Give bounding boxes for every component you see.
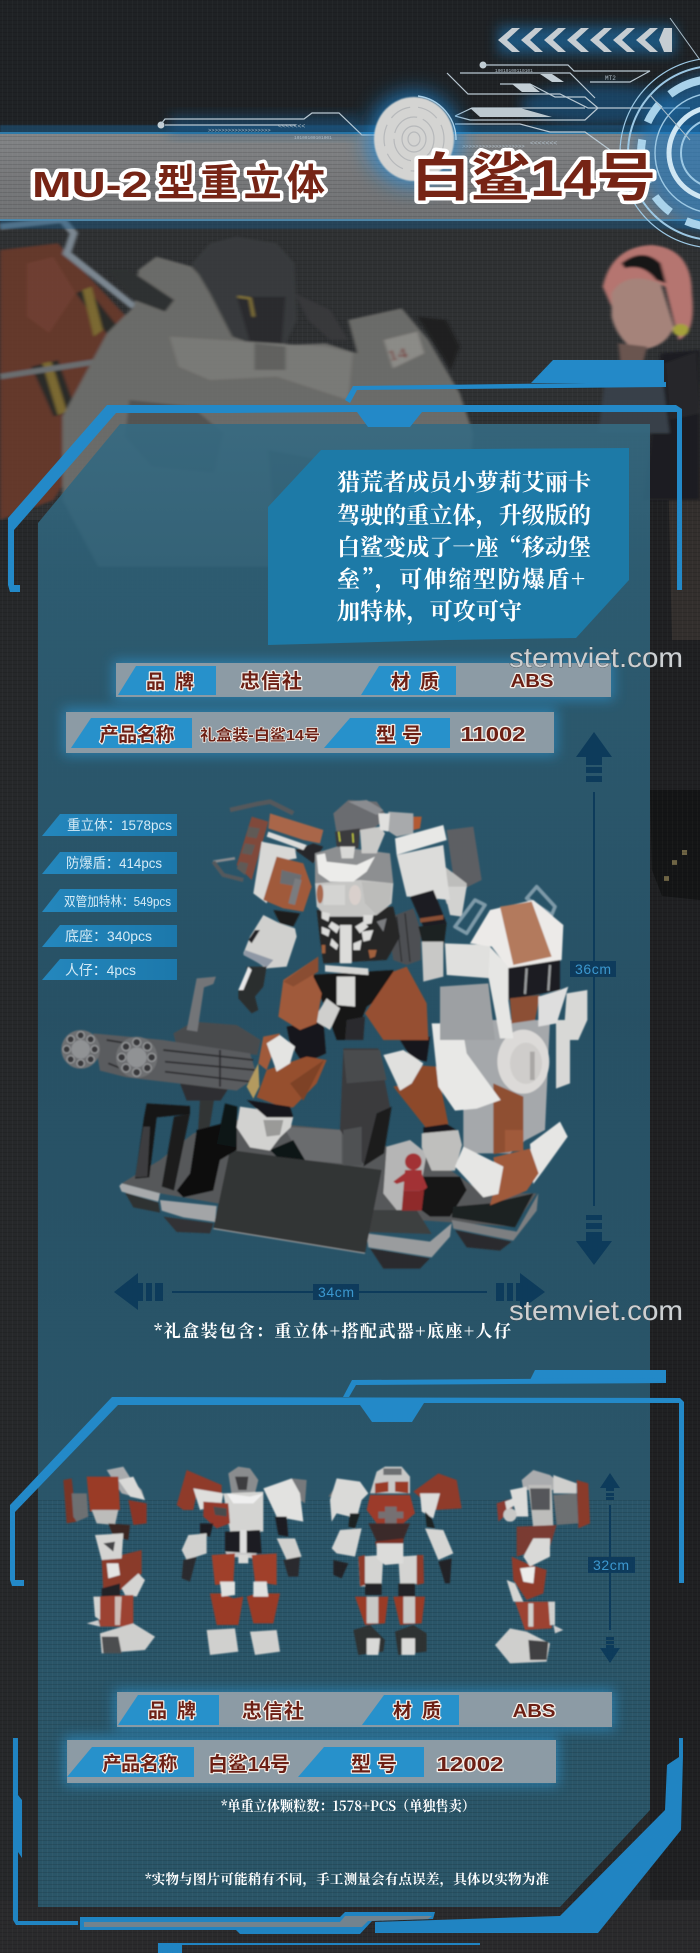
table: gift set row 2: 礼盒装-白鲨14号 (200, 726, 320, 744)
tag: gatling count: 双管加特林：549pcs (64, 894, 171, 909)
note: single mech piece count: *单重立体颗粒数：1578+PCS（单独售卖） (221, 1796, 475, 1816)
table: single mech row 1 (114, 1689, 615, 1730)
table: single mech row 2: 12002 (436, 1754, 504, 1776)
background mech illustration: 14 (385, 345, 410, 364)
mech left leg (237, 1020, 327, 1160)
frame: bottom tech border (13, 1738, 683, 1953)
red minifigure (393, 1153, 427, 1211)
view: left side (63, 1467, 155, 1653)
left arm (213, 802, 323, 1013)
frame: bottom inner grey strip (84, 1916, 432, 1927)
circuit lines decoration: <<<<<<< (530, 140, 557, 147)
panel: description box (268, 448, 629, 645)
title: model type: 型重立体 (157, 163, 325, 205)
product photos: four views of the mech (63, 1467, 590, 1663)
text: description: 白鲨变成了一座“移动堡 (337, 529, 591, 562)
watermark: stemviet.com (509, 642, 683, 673)
title: model type: MU-2 (32, 164, 148, 205)
base, gatling, lower legs, lower shield (61, 1020, 570, 1269)
table: gift set row 2: 型号 (376, 724, 422, 747)
tag: shield count: 防爆盾：414pcs (66, 855, 162, 871)
tag: base count (42, 925, 177, 947)
tag: minifig count: 人仔：4pcs (65, 962, 136, 978)
table: single mech row 2 (64, 1736, 559, 1786)
text: description (337, 464, 591, 626)
text: description: 驾驶的重立体，升级版的 (337, 497, 591, 530)
table: single mech row 1: 材质 (393, 1699, 441, 1722)
table: gift set row 1: ABS (510, 671, 554, 691)
circuit lines decoration: MT2 (605, 75, 616, 82)
title band (0, 125, 700, 229)
gatling gun (61, 1022, 261, 1197)
dimension: height 32cm: 32cm (593, 1557, 629, 1573)
title: product name: 白鲨14号 (411, 150, 656, 208)
table: gift set row 2 (63, 708, 557, 756)
dimension: height 36cm: 36cm (575, 961, 611, 977)
frame: upper tech border (8, 360, 682, 592)
base (119, 1120, 538, 1269)
table: gift set row 1: 品牌 (146, 671, 194, 693)
table: single mech row 1: ABS (512, 1701, 556, 1721)
caption: gift set contents: *礼盒装包含：重立体+搭配武器+底座+人仔 (154, 1317, 511, 1342)
tag: mech count: 重立体：1578pcs (67, 817, 172, 833)
shield upper (422, 887, 587, 1040)
circuit lines decoration (158, 62, 690, 150)
icon: right HUD rings (620, 18, 700, 248)
table: gift set row 1 (113, 660, 614, 700)
dimension: width 34cm: 34cm (318, 1284, 354, 1300)
product photo: gift set mech with shield, gatling and base (61, 800, 587, 1269)
view: front (177, 1467, 307, 1655)
view: right side (495, 1470, 590, 1663)
circuit lines decoration: 10100100101001 (294, 135, 332, 141)
pelvis and thighs (278, 957, 428, 1040)
title: model type (32, 163, 325, 205)
mech support pillar (340, 1048, 392, 1167)
icon: glowing disc (366, 91, 462, 187)
shield lower (432, 1020, 570, 1205)
tag: base count: 底座：340pcs (65, 928, 152, 944)
icon: chevron row (498, 26, 676, 54)
table: single mech row 1: 品牌 (148, 1700, 196, 1722)
table: gift set row 1: 忠信社 (240, 670, 302, 693)
background pilot girl (598, 245, 700, 500)
head (333, 800, 422, 858)
text: description: 猎荒者成员小萝莉艾丽卡 (337, 464, 591, 497)
text: description: 加特林，可攻可守 (337, 593, 522, 626)
table: gift set row 2: 11002 (460, 724, 526, 746)
tag: mech count (42, 814, 177, 836)
table: single mech row 2: 白鲨14号 (208, 1753, 290, 1776)
watermark lower: stemviet.com (509, 1295, 683, 1326)
circuit lines decoration: >>>>>>>>>>>>>>>>>>> (208, 127, 271, 134)
circuit lines decoration: 10010100110101 (495, 68, 533, 74)
mech right leg (383, 1037, 462, 1171)
torso (315, 847, 400, 975)
background mech illustration (0, 220, 473, 567)
table: gift set row 1: 材质 (391, 670, 439, 693)
tag: gatling count (42, 889, 177, 912)
dimension: width 34cm (114, 1273, 545, 1310)
table: single mech row 1: 忠信社 (242, 1700, 304, 1723)
dimension: height 32cm (588, 1473, 635, 1663)
note: disclaimer: *实物与图片可能稍有不同，手工测量会有点误差，具体以实物为准 (145, 1868, 550, 1888)
frame: middle tech border (10, 1370, 684, 1586)
circuit lines decoration: >>>>>>>>>>>>>>>>>>> (462, 143, 525, 150)
text: description: 垒”，可伸缩型防爆盾+ (337, 561, 585, 594)
tag: shield count (42, 852, 177, 874)
view: back (328, 1467, 462, 1655)
panel: main teal panel (38, 424, 650, 1907)
table: single mech row 2: 产品名称 (102, 1753, 178, 1775)
upper mech and upper shield (187, 800, 587, 1040)
circuit lines decoration: <<<<<<< (278, 123, 305, 130)
tag: minifig count (42, 959, 177, 980)
table: gift set row 2: 产品名称 (100, 724, 174, 746)
legend: part counts (42, 814, 177, 980)
dimension: height 36cm (570, 732, 616, 1265)
table: single mech row 2: 型号 (351, 1753, 397, 1776)
gatling handle (187, 977, 216, 1032)
turbine and right arm (387, 825, 482, 965)
